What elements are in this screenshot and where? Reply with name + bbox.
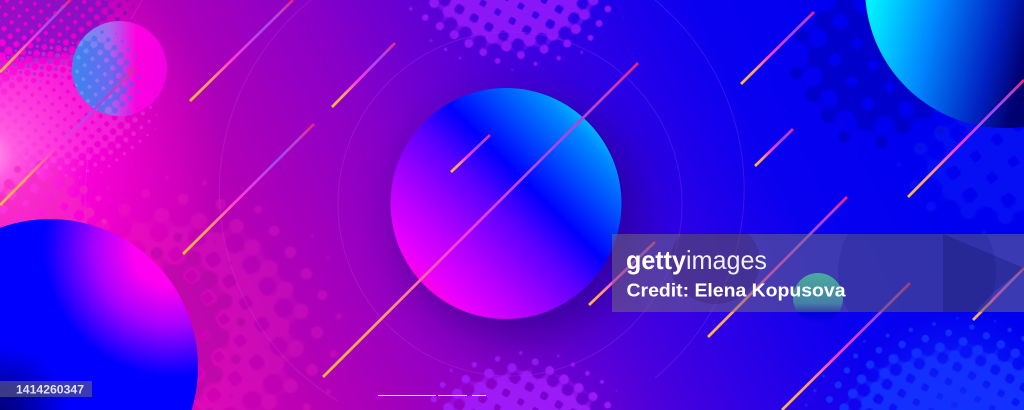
image id tag (0, 381, 92, 397)
watermark panel (612, 234, 1024, 312)
halftone: lower left light dots (84, 176, 342, 410)
bottom white line (378, 394, 486, 396)
watermark credit: Credit: Elena Kopusova (626, 280, 847, 300)
halftone: bottom right blue dots (804, 317, 1024, 410)
sphere: small teal (793, 273, 843, 323)
sphere: centre (390, 88, 622, 319)
watermark logo: gettyimages (626, 245, 767, 275)
sphere: top right (866, 0, 1024, 128)
halftone: bottom centre dots (430, 351, 618, 410)
sphere: top left with halftone (72, 21, 167, 116)
halftone: left edge magenta dots (0, 154, 107, 228)
halftone: top right dark dots (778, 0, 944, 160)
halftone: left pink dots (0, 40, 159, 182)
halftone: right light blue dots (897, 120, 1024, 234)
concentric rings (85, 0, 744, 410)
halftone: top centre dots (408, 0, 624, 71)
sphere: bottom left (0, 219, 198, 410)
shadow of central sphere (400, 96, 644, 340)
image id tag: 1414260347 (16, 384, 84, 396)
halftone: lower left dark dots (150, 232, 246, 410)
halftone: top left dark dots (0, 0, 141, 84)
